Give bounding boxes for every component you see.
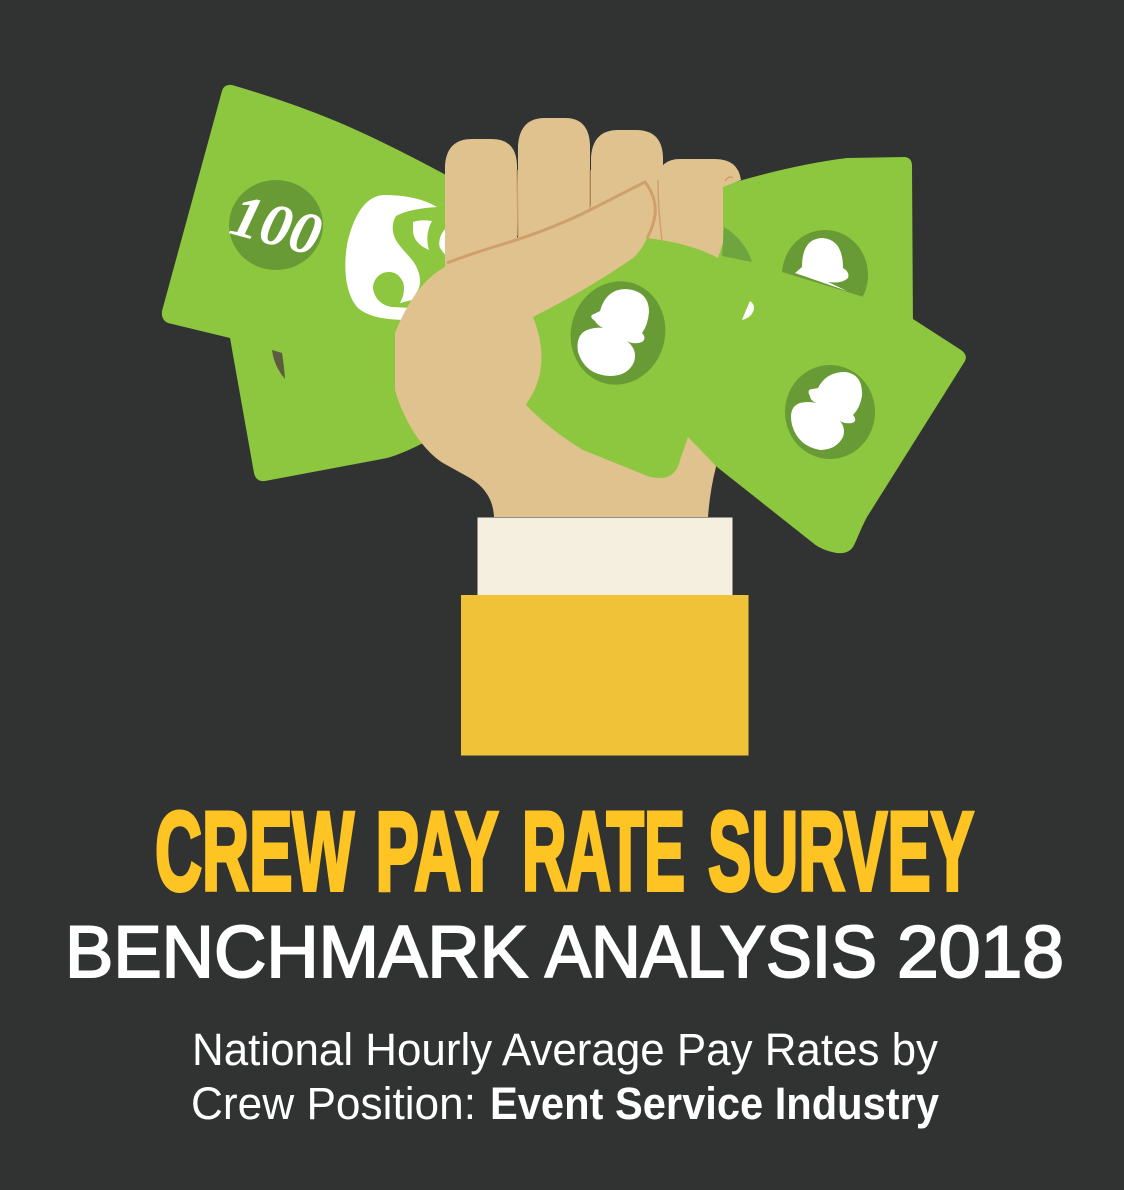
dark sliver: [272, 350, 285, 379]
finger: little: [658, 159, 741, 262]
subtitle: benchmark analysis 2018: 2018: [897, 912, 1064, 993]
hand: [395, 118, 741, 517]
shirt cuff: [478, 518, 732, 596]
finger: first: [445, 139, 517, 290]
green sliver behind bills: [722, 227, 752, 262]
finger: second: [518, 118, 590, 290]
emblem: 100: 100: [224, 182, 328, 269]
money bills: front pair: [526, 238, 966, 553]
description text: [191, 1024, 939, 1129]
palm and wrist: [395, 182, 716, 517]
thumb outline: [447, 182, 655, 263]
emblem: top right baby: [782, 230, 868, 320]
subtitle: benchmark analysis 2018: ANALYSIS: [545, 912, 877, 993]
illustration: hand holding cash: [162, 85, 966, 756]
description text: Event Service Industry: [490, 1078, 939, 1129]
money bill: back right: [700, 157, 913, 330]
white sliver: [742, 301, 754, 320]
subtitle: benchmark analysis 2018: BENCHMARK: [65, 912, 528, 993]
title: crew pay rate survey: RATE: [522, 789, 685, 914]
emblem: left baby: [559, 271, 677, 395]
money bill: left: [162, 85, 470, 481]
title: crew pay rate survey: [155, 789, 974, 914]
emblem: white swirl: [345, 195, 450, 320]
finger: third: [591, 130, 663, 290]
finger creases: [517, 170, 733, 240]
description text: National Hourly Average Pay Rates by: [192, 1024, 938, 1075]
title: crew pay rate survey: PAY: [376, 789, 498, 914]
description text: Crew Position:: [191, 1078, 476, 1129]
jacket sleeve: [461, 595, 748, 756]
title: crew pay rate survey: CREW: [155, 789, 354, 914]
emblem: right baby: [785, 365, 875, 459]
subtitle: benchmark analysis 2018: [65, 912, 1064, 993]
